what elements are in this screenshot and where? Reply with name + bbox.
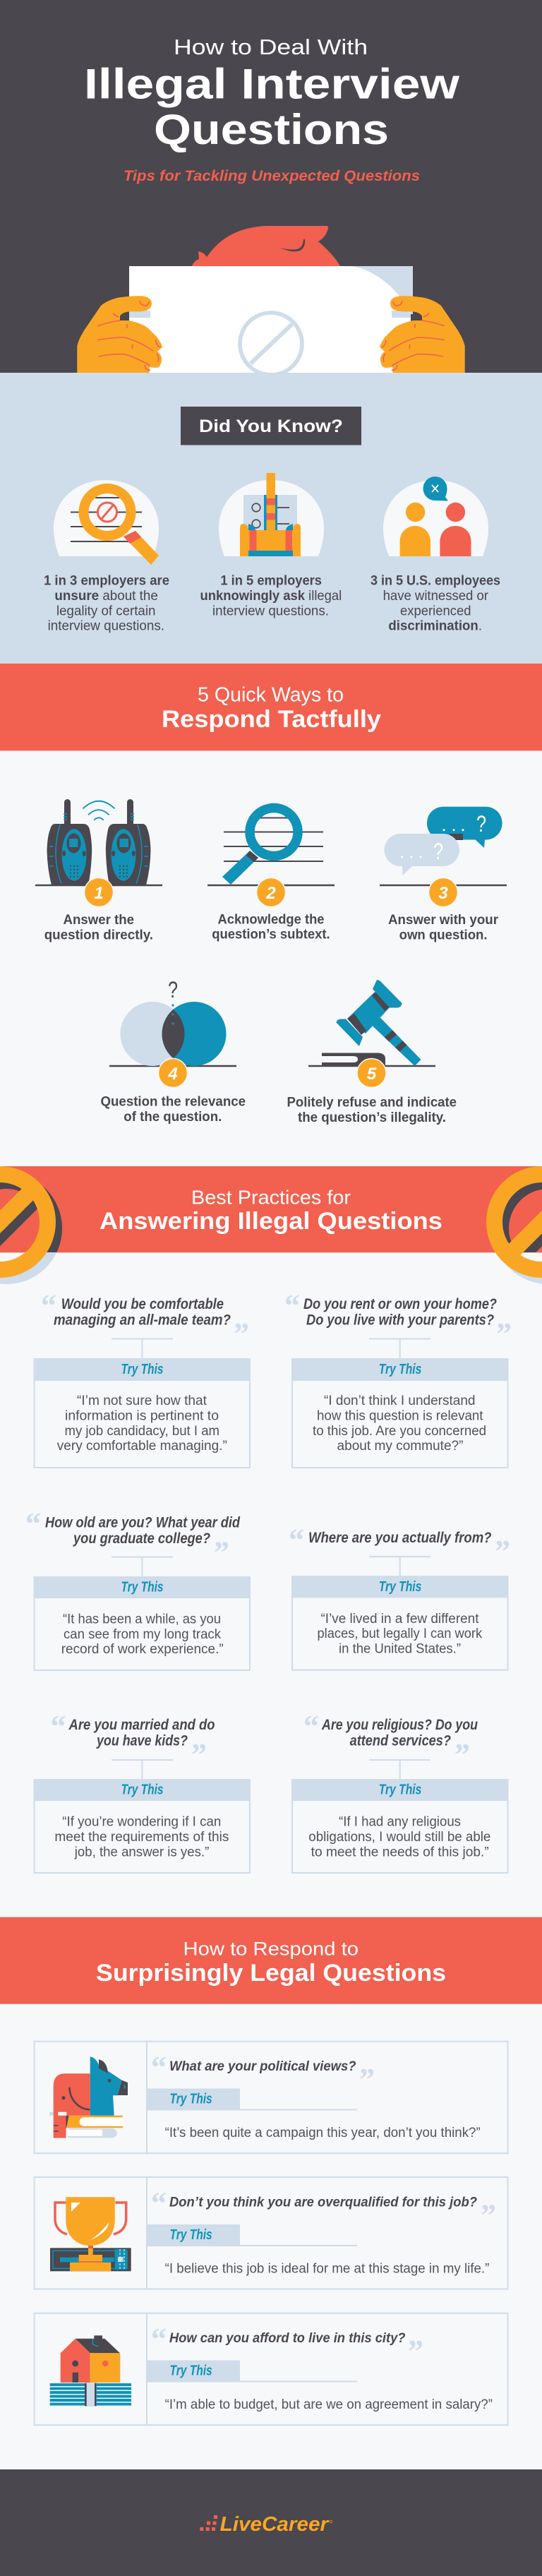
title: Illegal Interview	[84, 61, 459, 107]
walkie talkie left	[47, 799, 92, 885]
card: overqualified: ”	[481, 2198, 496, 2232]
card: religious: ”	[454, 1737, 470, 1772]
stat: 1 in 3 employers	[44, 574, 169, 634]
icon: speech bubbles: ?	[476, 811, 486, 837]
card: religious: “	[303, 1709, 319, 1744]
card: all-male team: Try This	[121, 1362, 164, 1377]
number badge 3: 3	[438, 884, 448, 903]
panel: five quick ways	[35, 799, 507, 1125]
stat: 1 in 5 employers: 1 in 5 employers	[220, 574, 322, 589]
icon: left prohibition sign	[0, 1175, 54, 1276]
step 1 text: question directly.	[44, 928, 153, 942]
step 2 text: Acknowledge the	[217, 912, 325, 928]
stat: 1 in 5 employers: interview questions.	[212, 604, 329, 618]
banner: 5 quick ways: Respond Tactfully	[162, 706, 381, 733]
number badge 1: 1	[94, 884, 104, 903]
card: all-male team	[34, 1288, 251, 1468]
card: rent or own: ”	[496, 1317, 512, 1351]
stat: 1 in 3 employers: interview questions.	[48, 619, 164, 634]
step 1 text: Answer the	[64, 913, 134, 928]
card: overqualified: Try This	[169, 2227, 212, 2243]
icon: gavel and book	[322, 980, 421, 1066]
card: overqualified: “I believe this job is ideal for me at this stage in my life.”	[165, 2262, 489, 2276]
icon: stamp on ballot	[219, 473, 324, 556]
card: overqualified: Don’t you think you are overqualified for this job?	[169, 2195, 477, 2210]
icon: speech bubbles: ?	[433, 839, 443, 864]
banner: best practices	[0, 1166, 542, 1276]
banner: best practices: Best Practices for	[191, 1186, 351, 1208]
card: religious: attend services?	[350, 1733, 451, 1749]
step 4 text	[100, 1095, 246, 1125]
banner: surprisingly legal questions: How to Respond to	[183, 1939, 359, 1960]
number badge 2: 2	[265, 884, 276, 903]
stat: 3 in 5 U.S. employees: have witnessed or	[383, 589, 489, 604]
stat: 3 in 5 U.S. employees	[371, 574, 500, 634]
step 3 text: own question.	[399, 928, 488, 942]
step 3 text: Answer with your	[388, 913, 499, 928]
card: how old: record of work experience.”	[61, 1642, 224, 1657]
card: married and kids: meet the requirements of this	[54, 1830, 229, 1845]
icon: right prohibition sign	[494, 1175, 542, 1276]
icon: right hand	[380, 296, 465, 373]
icon: left hand	[77, 296, 162, 373]
icon: venn diagram	[120, 977, 226, 1066]
number badge 2	[257, 878, 285, 906]
card: how old: “It has been a while, as you	[63, 1612, 221, 1627]
stat: 1 in 3 employers: unsure about the	[54, 589, 158, 604]
title: How to Deal With	[174, 35, 368, 59]
step 2 text: question’s subtext.	[212, 928, 330, 942]
step 4 text: Question the relevance	[100, 1095, 246, 1110]
card: all-male team: my job candidacy, but I am	[65, 1424, 219, 1439]
icon: trophy on book	[50, 2197, 131, 2271]
card: married and kids: Try This	[121, 1782, 164, 1797]
stat: 1 in 3 employers: 1 in 3 employers are	[44, 574, 169, 589]
stat: 3 in 5 U.S. employees: experienced	[400, 604, 471, 618]
step 1 text	[44, 913, 153, 942]
card: political views: Try This	[169, 2092, 212, 2107]
card: religious: obligations, I would still be able	[308, 1830, 490, 1845]
card: rent or own: “I don’t think I understand	[324, 1394, 476, 1408]
illustration: person hiding behind paper	[77, 226, 465, 375]
number badge 3	[429, 878, 457, 906]
icon: elephant and donkey on books	[49, 2056, 128, 2138]
card: religious: “If I had any religious	[339, 1815, 461, 1830]
card: how old: ”	[214, 1535, 229, 1570]
card: religious	[291, 1709, 508, 1873]
card: afford city: “	[151, 2322, 167, 2356]
card: afford city: How can you afford to live in this city?	[169, 2331, 406, 2346]
card: political views: “	[151, 2050, 167, 2085]
icon: house on money	[50, 2335, 131, 2406]
title	[84, 35, 459, 153]
icon: speech bubbles	[384, 807, 502, 875]
card: all-male team: “	[41, 1288, 56, 1323]
footer	[0, 2469, 542, 2576]
card: afford city: “I’m able to budget, but are we on agreement in salary?”	[165, 2397, 493, 2412]
card: married and kids	[34, 1709, 251, 1873]
card: how old: How old are you? What year did	[45, 1515, 241, 1530]
card: where from: places, but legally I can work	[318, 1627, 483, 1641]
card: married and kids: “If you’re wondering if I can	[62, 1815, 221, 1830]
card: married and kids: ”	[191, 1737, 207, 1772]
card: political views: ”	[359, 2062, 375, 2097]
banner: surprisingly legal questions	[0, 1917, 542, 2004]
card: afford city: ”	[408, 2334, 423, 2368]
card: all-male team: very comfortable managing.”	[57, 1439, 227, 1454]
card: how old	[25, 1506, 251, 1670]
card: political views	[34, 2041, 508, 2154]
subtitle: Tips for Tackling Unexpected Questions	[124, 168, 420, 184]
card: rent or own: Do you rent or own your home?	[303, 1296, 497, 1312]
number badge 1	[85, 878, 113, 906]
card: how old: you graduate college?	[73, 1530, 210, 1547]
heading: did you know: Did You Know?	[199, 417, 343, 436]
icon: magnifying glass	[222, 808, 323, 885]
card: rent or own: about my commute?”	[337, 1439, 463, 1454]
title: Questions	[154, 106, 389, 153]
heading: did you know	[181, 407, 361, 445]
card: political views: What are your political views?	[169, 2059, 356, 2074]
card: rent or own	[284, 1288, 512, 1468]
card: all-male team: “I’m not sure how that	[77, 1394, 207, 1408]
card: where from: Where are you actually from?	[308, 1530, 492, 1546]
card: overqualified	[34, 2176, 508, 2289]
card: married and kids: job, the answer is yes.”	[74, 1845, 209, 1859]
banner: 5 quick ways	[0, 664, 542, 750]
card: how old: can see from my long track	[64, 1627, 221, 1642]
card: rent or own: Do you live with your parents?	[306, 1312, 494, 1329]
card: rent or own: how this question is relevant	[317, 1409, 483, 1423]
number badge 5	[357, 1059, 386, 1087]
card: afford city: Try This	[169, 2364, 212, 2379]
number badge 5: 5	[367, 1065, 377, 1084]
card: where from: in the United States.”	[339, 1642, 461, 1656]
card: where from: ”	[495, 1534, 510, 1569]
number badge 4: 4	[167, 1065, 178, 1084]
card: married and kids: “	[51, 1709, 66, 1744]
card: rent or own: “	[284, 1288, 300, 1323]
step 2 text	[212, 912, 330, 942]
card: afford city	[34, 2313, 508, 2426]
step 4 text: of the question.	[124, 1110, 222, 1125]
stat: 1 in 5 employers	[200, 574, 342, 618]
card: where from: “I’ve lived in a few different	[320, 1612, 479, 1627]
stat: 3 in 5 U.S. employees: 3 in 5 U.S. employees	[371, 574, 500, 589]
step 5 text: Politely refuse and indicate	[287, 1096, 457, 1110]
card: all-male team: information is pertinent to	[65, 1409, 219, 1423]
banner: 5 quick ways: 5 Quick Ways to	[198, 683, 344, 706]
card: overqualified: “	[151, 2186, 167, 2221]
panel: header	[0, 0, 542, 375]
icon: two people with speech bubble	[383, 477, 488, 556]
icon: venn diagram: ?	[168, 977, 178, 1002]
card: all-male team: Would you be comfortable	[61, 1296, 224, 1312]
card: political views: “It’s been quite a campaign this year, don’t you think?”	[165, 2126, 481, 2140]
card: all-male team: ”	[234, 1317, 249, 1351]
icon: magnifying glass over document	[54, 480, 159, 565]
step 5 text: the question’s illegality.	[298, 1110, 446, 1125]
stat: 1 in 5 employers: unknowingly ask illegal	[200, 589, 342, 604]
panel: did you know	[0, 373, 542, 664]
stat: 1 in 3 employers: legality of certain	[56, 604, 155, 618]
card: how old: “	[25, 1506, 41, 1541]
card: where from: “	[289, 1523, 304, 1557]
card: married and kids: Are you married and do	[68, 1717, 215, 1733]
card: how old: Try This	[121, 1580, 164, 1595]
card: rent or own: Try This	[379, 1362, 421, 1377]
card: married and kids: you have kids?	[96, 1733, 188, 1749]
card: religious: to meet the needs of this job.”	[311, 1845, 489, 1859]
card: religious: Are you religious? Do you	[321, 1717, 478, 1733]
card: where from	[289, 1523, 510, 1670]
walkie talkie right	[106, 799, 151, 885]
logo: LiveCareer: LiveCareer	[220, 2513, 330, 2536]
icon: walkie talkies	[47, 799, 151, 885]
card: where from: Try This	[379, 1579, 421, 1595]
banner: best practices: Answering Illegal Questions	[100, 1208, 442, 1235]
card: all-male team: managing an all-male team?	[54, 1312, 231, 1329]
card: religious: Try This	[379, 1782, 421, 1797]
banner: surprisingly legal questions: Surprisingly Legal Questions	[96, 1960, 446, 1987]
number badge 4	[158, 1059, 188, 1087]
card: rent or own: to this job. Are you concerned	[313, 1424, 486, 1439]
step 5 text	[287, 1096, 457, 1125]
step 3 text	[388, 913, 499, 942]
stat: 3 in 5 U.S. employees: discrimination.	[388, 619, 482, 634]
